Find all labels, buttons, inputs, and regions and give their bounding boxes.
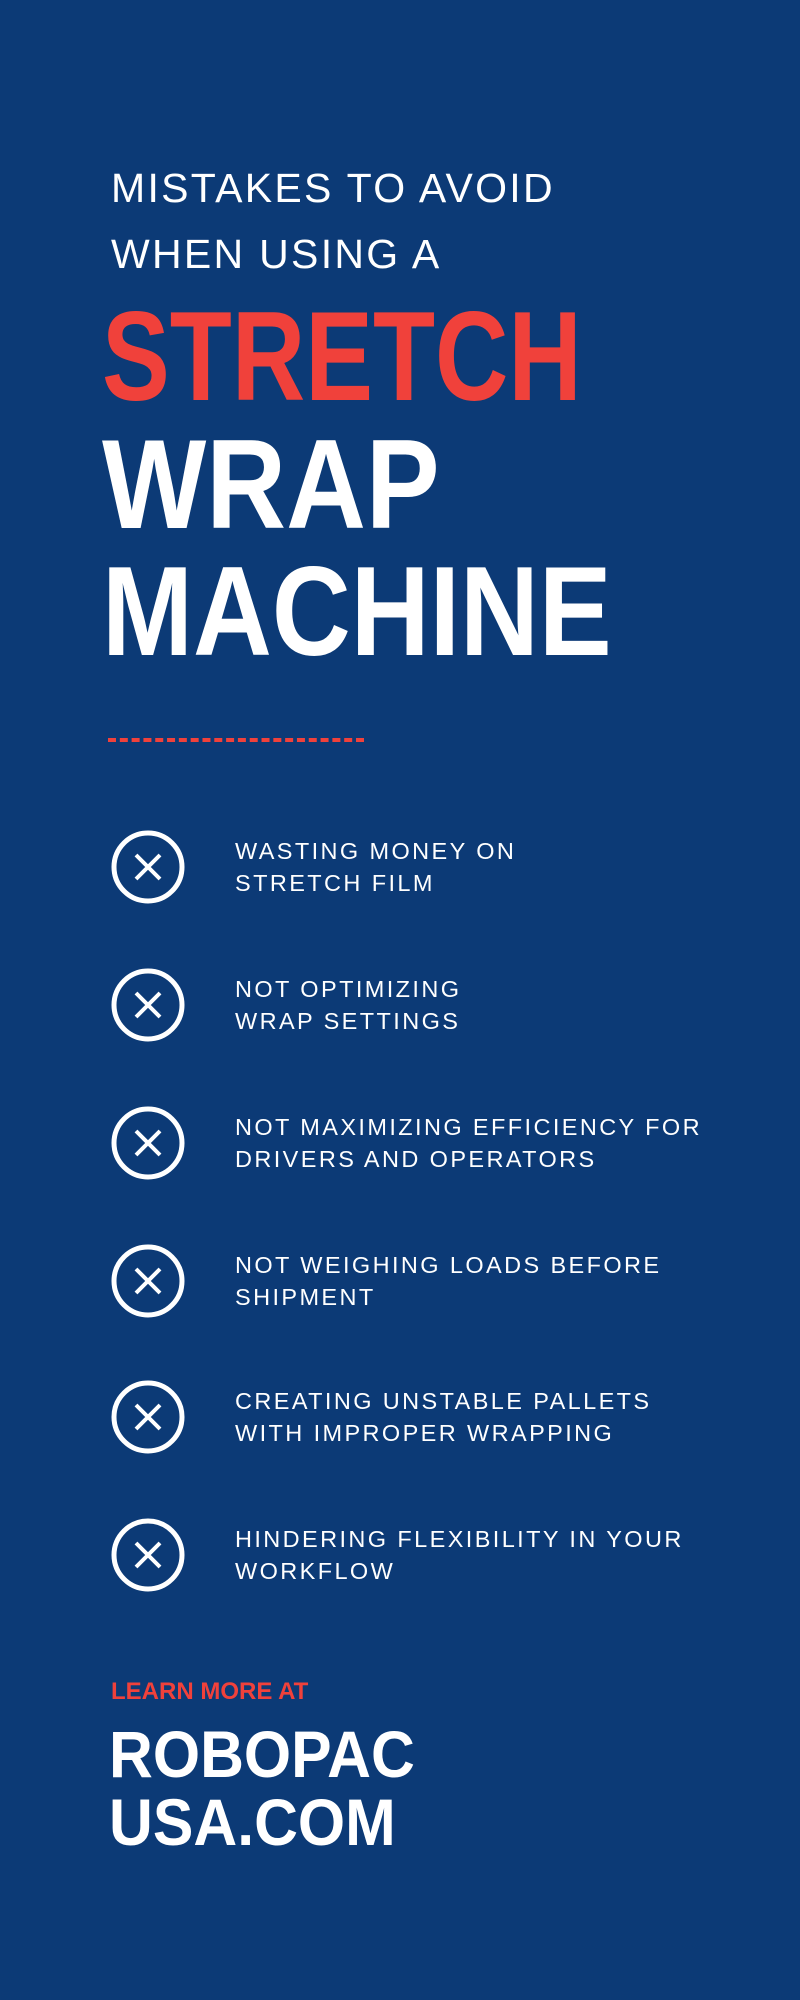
title subheading: WHEN USING A xyxy=(111,231,442,277)
website xyxy=(109,1717,415,1859)
item 2: WRAP SETTINGS xyxy=(235,1008,460,1034)
item 5: WITH IMPROPER WRAPPING xyxy=(235,1420,614,1446)
title subheading: MISTAKES TO AVOID xyxy=(111,165,555,211)
item 6: HINDERING FLEXIBILITY IN YOUR xyxy=(235,1526,684,1552)
item 3 xyxy=(112,1106,702,1180)
item 5: CREATING UNSTABLE PALLETS xyxy=(235,1388,652,1414)
item 5 xyxy=(112,1380,652,1454)
item 2 xyxy=(112,968,461,1042)
title subheading xyxy=(111,165,555,277)
item 6 xyxy=(112,1518,684,1592)
item 2: NOT OPTIMIZING xyxy=(235,976,461,1002)
item 3: DRIVERS AND OPERATORS xyxy=(235,1146,597,1172)
title WRAP: WRAP xyxy=(102,413,440,555)
item 1 xyxy=(112,830,516,904)
title STRETCH: STRETCH xyxy=(102,285,582,427)
item 6: WORKFLOW xyxy=(235,1558,395,1584)
item 3: NOT MAXIMIZING EFFICIENCY FOR xyxy=(235,1114,702,1140)
list of mistakes xyxy=(112,830,702,1592)
item 4 xyxy=(112,1244,661,1318)
website: ROBOPAC xyxy=(109,1717,415,1791)
item 1: WASTING MONEY ON xyxy=(235,838,516,864)
item 4: SHIPMENT xyxy=(235,1284,376,1310)
learn more label: LEARN MORE AT xyxy=(111,1678,308,1705)
dashed divider xyxy=(108,738,364,742)
website: USA.COM xyxy=(109,1785,396,1859)
title MACHINE: MACHINE xyxy=(102,540,612,682)
item 4: NOT WEIGHING LOADS BEFORE xyxy=(235,1252,661,1278)
item 1: STRETCH FILM xyxy=(235,870,435,896)
